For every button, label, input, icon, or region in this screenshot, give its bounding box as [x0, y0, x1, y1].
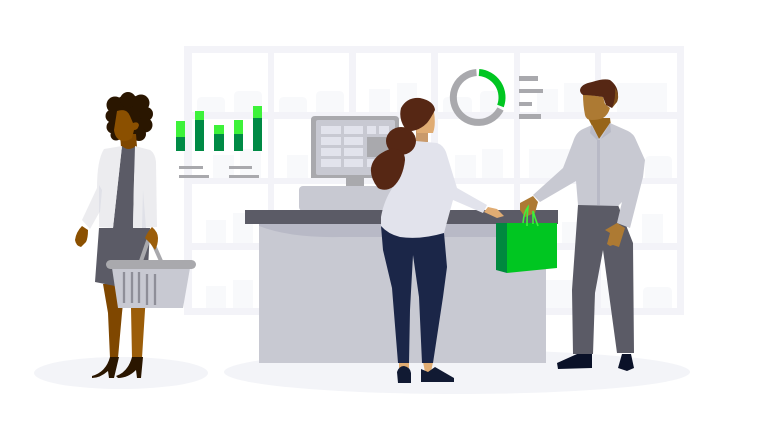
sweater: [381, 140, 487, 238]
shoes: [557, 354, 592, 369]
floor shadows: [34, 350, 690, 394]
face: [414, 112, 435, 133]
donut legend lines: [519, 76, 543, 119]
hair: [371, 98, 435, 190]
legs: [103, 284, 125, 358]
hand: [484, 207, 504, 218]
shirt: [533, 123, 645, 228]
shirt details: [590, 123, 611, 205]
counter body: [259, 224, 546, 363]
hand: [75, 226, 88, 247]
basket: [106, 227, 196, 308]
face: [583, 94, 610, 120]
person: customer receiving bag: [496, 79, 645, 371]
person: cashier: [371, 98, 504, 383]
face: [114, 110, 139, 141]
countertop: [245, 210, 558, 224]
donut chart: [453, 72, 502, 122]
hair: [106, 92, 153, 141]
neck: [416, 128, 428, 142]
pants: [572, 205, 634, 354]
shelf frame: [184, 46, 684, 315]
ankles: [399, 362, 433, 372]
hair: [580, 79, 618, 108]
neck: [588, 118, 611, 139]
shoes: [92, 357, 119, 378]
bar chart: [176, 106, 262, 151]
chart legend lines: [179, 166, 259, 178]
person: customer with basket: [75, 92, 196, 378]
neck: [120, 134, 137, 150]
hand on hip: [605, 223, 625, 247]
cardigan: [82, 146, 157, 229]
shelf products: [197, 83, 672, 308]
shoes: [397, 366, 411, 383]
cash register monitor: [299, 116, 399, 211]
hair highlight: [612, 88, 618, 108]
shopping bag: [496, 196, 557, 273]
dress: [95, 146, 150, 288]
pants: [381, 226, 447, 363]
